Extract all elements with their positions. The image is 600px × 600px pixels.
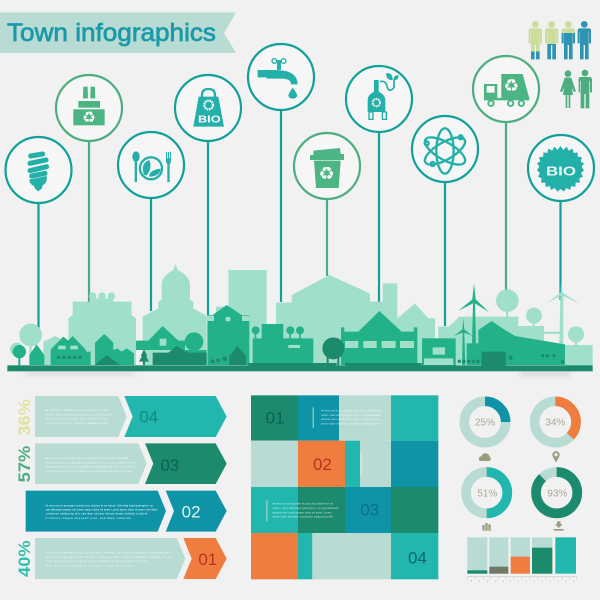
panel: colour block grid [251,395,438,579]
arrow row 03: eirmod tempor invidunt ut labore et dolore magna aliquyam erat, sed [46,469,132,473]
arrow row 01: 01 [198,550,217,569]
arrow row 01: diam nonumy eirmod tempor invidunt ut labore et dolore magna aliquyam [46,559,148,563]
ground shadow [25,372,570,376]
arrow row 01: sanctus est Lorem ipsum dolor sit amet. Lorem ipsum dolor sit amet, consetetur sadipscing elitr, sed [46,555,173,559]
icon: recycling truck: ♻ [504,76,519,96]
percent labels: 36% [15,399,34,436]
title banner [0,12,236,53]
percent labels [15,399,34,577]
people icons [529,21,592,108]
icon: recycling truck [484,74,529,106]
title: Town infographics [7,19,216,47]
icon: plate with leaf and cutlery [132,151,171,182]
grid text block bottom: sanctus est Lorem ipsum dolor sit amet. Lorem [272,510,332,514]
icon: recycling bin: ♻ [319,163,335,184]
icon: factory: ♻ [82,109,96,127]
icon: bio seal: BIO [546,164,576,179]
icon: bar chart [482,523,491,531]
arrow row 03: kasd gubergren, no sea takimata sanctus est Lorem ipsum dolor sit amet [46,460,136,464]
skyline: windows [58,316,453,365]
skyline: back layer [10,264,593,366]
arrow row 01: At vero eos et accusam et justo duo dolores et ea rebum. Stet clita kasd gubergren, no sea takimata [46,551,170,555]
grid label 01: 01 [266,408,285,427]
icon: factory [73,87,105,127]
grid text block top: At vero eos et accusam et justo duo dolores et ea [321,409,382,413]
arrow row 04: At vero eos et accusam et justo duo dolores et ea [46,408,108,412]
arrow row 04 [35,396,227,437]
grid text block top: ipsum dolor sit amet, consetetur sadipscing elitr [321,421,381,425]
icon: download [554,521,564,531]
donut 25% [464,401,506,443]
icon: bio bag: BIO [198,115,221,126]
arrow row 03: 03 [160,456,179,475]
skyline: ground base [7,365,593,371]
arrow row 02: sea takimata sanctus est Lorem ipsum dolor sit amet. Lorem ipsum dolor sit amet, sed diam [46,507,158,511]
grid text block bottom: At vero eos et accusam et justo duo dolores et ea [272,502,334,506]
donut 93%: 93% [547,488,567,499]
arrow row 04: ipsum dolor sit amet, consetetur sadipscing elitr [46,421,107,425]
grid text block bottom: rebum. Stet clita kasd gubergren, no sea takimata [272,506,339,510]
panel: donut charts and bars [464,401,577,581]
percent labels: 57% [15,445,34,482]
grid text block top: rebum. Stet clita kasd gubergren, no sea takimata [321,413,381,417]
grid label 04: 04 [408,548,427,567]
pin circles [6,44,594,203]
panel: numbered arrows [15,396,227,579]
arrow row 04: sanctus est Lorem ipsum dolor sit amet. Lorem [46,417,108,421]
grid text block bottom [272,502,339,519]
arrow row 03: Lorem ipsum dolor sit amet, consetetur sadipscing elitr, sed diam nonumy [46,465,136,469]
arrow row 04: 04 [139,408,158,427]
stacked bar chart [467,537,577,581]
donut 34%: 34% [545,418,565,429]
donut 51% [466,472,507,513]
arrow row 03 [35,443,227,484]
grid label 03: 03 [360,501,379,520]
icon: atom [421,128,469,174]
stems [38,110,560,330]
icon: eco plug [368,73,399,119]
donut 51%: 51% [477,488,497,499]
grid label 02: 02 [313,455,332,474]
grid text block top [321,409,382,425]
arrow row 04: rebum. Stet clita kasd gubergren, no sea takimata [46,412,112,416]
arrow row 02: et dolore magna aliquyam erat, sed diam voluptua. [46,516,132,520]
skyline: middle layer [13,283,565,366]
arrow row 02 [26,491,227,532]
icon: water tap [258,59,298,99]
grid text block bottom: ipsum dolor sit amet, consetetur sadipscing elitr [272,515,333,519]
donut 25%: 25% [475,418,495,429]
arrow row 01 [35,538,227,579]
grid text block top: sanctus est Lorem ipsum dolor sit amet. Lorem [321,417,381,421]
icon: cloud [479,453,491,461]
skyline: front layer [7,337,593,371]
arrow row 02: 02 [182,503,201,522]
town skyline [7,264,593,371]
icon: recycling bin [310,148,344,188]
icon: bio bag [193,89,224,127]
icon: bio seal [537,146,584,192]
arrow row 01: erat, sed diam voluptua. At vero eos et accusam et justo [46,563,132,567]
icon: light bulb [29,154,47,191]
arrow row 03: At vero eos et accusam et justo duo dolores et ea rebum. Stet clita [46,456,129,460]
donut 93% [536,472,577,513]
percent labels: 40% [15,540,34,577]
arrow row 02: At vero eos et accusam et justo duo dolores et ea rebum. Stet clita kasd gubergren, no [46,503,154,507]
arrow row 02: consetetur sadipscing elitr, sed diam nonumy eirmod tempor invidunt ut labore [46,512,148,516]
donut 34% [535,401,576,443]
icon: location pin [552,451,560,463]
